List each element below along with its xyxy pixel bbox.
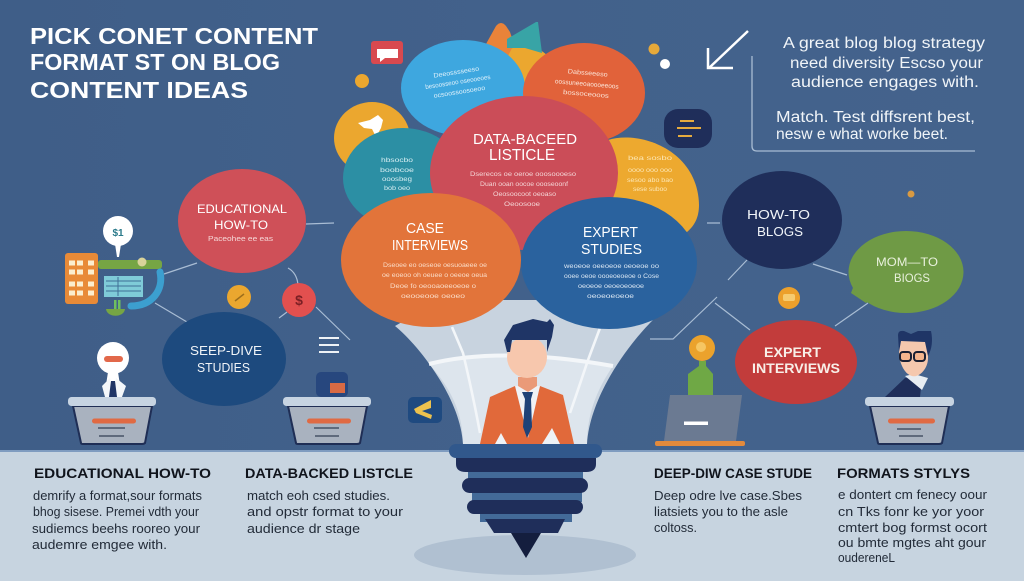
bubble: yellow right: sese suboo [633, 186, 667, 193]
icon: red chat box [371, 41, 403, 64]
decorative dots and badge icons [227, 44, 914, 423]
text block: deep-dive case study: DEEP-DIW CASE STUDE [654, 465, 812, 481]
bubble: yellow right: bea sosbo [628, 155, 673, 162]
bubble: case interviews: Deoe fo oeooaoeeoeoe o [390, 283, 476, 290]
bubble: educational how-to: EDUCATIONAL [197, 202, 287, 216]
bubble: how-to blogs: BLOGS [757, 225, 803, 239]
bubble: expert studies: oeoeoe oeoeoeoeoe [578, 283, 644, 290]
decorative dots and badge icons: $ [295, 292, 303, 308]
callout: strategy advice: A great blog blog strategy [783, 35, 985, 52]
text block: data-backed listicle [245, 465, 413, 536]
bubble: case interviews: CASE [406, 220, 444, 237]
text block: data-backed listicle: match eoh csed studies. [247, 488, 390, 503]
bubble: data-backed listicle: LISTICLE [489, 147, 555, 164]
bubble: case interviews: oe eoeoo oh oeuee o oeeoe oeua [382, 272, 487, 279]
text block: educational how-to: audemre emgee with. [32, 537, 167, 552]
text block: formats styles: e dontert cm fenecy oour [838, 487, 988, 502]
text block: formats styles: cmtert bog formst ocort [838, 520, 987, 535]
title: CONTENT IDEAS [30, 77, 248, 103]
bubble: teal: ooosbeg [382, 176, 412, 183]
callout: strategy advice: nesw e what worke beet. [776, 126, 948, 143]
funnel base [449, 444, 602, 558]
text block: educational how-to [32, 465, 211, 552]
text block: educational how-to: sudiemcs beehs rooreo your [32, 521, 201, 536]
text block: formats styles [837, 465, 988, 565]
title: PICK CONET CONTENT [30, 23, 318, 49]
bubble: blue [401, 40, 525, 136]
bubble: expert studies: oeoeoeoeoe [587, 293, 634, 300]
bubble: orange-red [523, 43, 645, 143]
bubble: how-to blogs: HOW-TO [747, 208, 810, 222]
funnel shadow [414, 535, 636, 575]
bubble: data-backed listicle: Oeosoocoot oeoaso [493, 191, 556, 198]
title: FORMAT ST ON BLOG [30, 49, 280, 75]
bubble: data-backed listicle: Dserecos oe oeroe ooosoooeso [470, 171, 576, 178]
text block: data-backed listicle: audience dr stage [247, 521, 360, 536]
bubble: green how-to blogs: MOM—TO [876, 257, 938, 269]
bubble: data-backed listicle [430, 96, 618, 250]
text block: data-backed listicle: DATA-BACKED LISTCLE [245, 465, 413, 481]
bubble: yellow right: oooo ooo ooo [628, 167, 672, 174]
bubble: expert studies [521, 197, 697, 329]
bottom panel background [0, 451, 1024, 581]
icon: building, screen and speech bubble: $1 [112, 228, 124, 239]
icon: white bird [358, 115, 383, 137]
bubble: yellow left [334, 102, 410, 174]
light beam [395, 300, 655, 444]
bubble: data-backed listicle: Oeoosooe [504, 201, 540, 208]
bubble: how-to blogs [722, 171, 842, 269]
central presenter [480, 319, 574, 444]
connector lines [155, 223, 868, 340]
bubble: yellow right: sesoo abo bao [627, 177, 673, 184]
bubble: educational how-to: HOW-TO [214, 218, 268, 232]
bubble: orange-red: oossuneeoaoooeeoos [555, 78, 620, 91]
bubble cluster [334, 22, 699, 329]
bubble: teal: hbsocbo [381, 157, 413, 164]
icon: building, screen and speech bubble [65, 216, 162, 316]
bubble: case interviews: Dseoee eo oeseoe oesuoaeee oe [383, 262, 487, 269]
bubble: blue: ocsoossoosoeoo [433, 85, 486, 100]
bubble: orange-red: bossoceooos [563, 89, 610, 100]
callout: strategy advice [708, 31, 985, 151]
text block: educational how-to: demrify a format,sour formats [33, 488, 202, 503]
text block: formats styles: FORMATS STYLYS [837, 465, 970, 481]
bubble: educational how-to [178, 169, 306, 273]
callout: strategy advice: audience engages with. [791, 74, 979, 91]
bubble: teal: boobcoe [380, 167, 415, 174]
text block: educational how-to: bhog sisese. Premei vdth your [33, 504, 200, 519]
icon: arrow pointing down-left [708, 31, 748, 68]
bubble: teal: bob oeo [384, 185, 410, 192]
bubble: expert studies: weoeoe oeeoeoe oeoeoe oo [563, 263, 659, 270]
bubble: case interviews: INTERVIEWS [392, 238, 468, 254]
bubble: yellow right [608, 138, 699, 232]
bubble: case interviews: oeooeooe oeoeo [401, 293, 465, 300]
text block: educational how-to: EDUCATIONAL HOW-TO [34, 465, 211, 481]
bubble: data-backed listicle: DATA-BACEED [473, 131, 577, 148]
bubble: expert interviews: INTERVIEWS [752, 361, 840, 376]
text block: formats styles: oudereneL [838, 550, 895, 565]
bubble: blue: Deeosssseeso [433, 66, 480, 80]
text block: formats styles: ou bmte mgtes aht gour [838, 535, 987, 550]
bubble: orange-red: Dabsseeeso [568, 68, 608, 79]
text block: formats styles: cn Tks fonr ke yor yoor [838, 504, 985, 519]
title [30, 23, 318, 103]
bubble: teal [343, 128, 463, 228]
desk: left [68, 397, 156, 444]
bubble: deep-dive studies [162, 312, 286, 406]
bubble: educational how-to: Paceohee ee eas [208, 234, 273, 243]
figure: person with glasses at desk [885, 331, 932, 397]
bubble: expert studies: ooee oeoe oooeoeoeoe o Cose [564, 273, 659, 280]
top pennant shapes [486, 22, 554, 98]
callout: strategy advice: need diversity Escso your [790, 55, 983, 72]
bubble: expert interviews: EXPERT [764, 344, 821, 360]
bubble: expert studies: STUDIES [581, 241, 642, 258]
text block: deep-dive case study: coltoss. [654, 520, 697, 535]
text block: deep-dive case study: Deep odre lve case.Sbes [654, 488, 802, 503]
text block: deep-dive case study [654, 465, 812, 535]
icon: laptop with green bottle [655, 335, 745, 446]
bubble: expert interviews [735, 320, 857, 404]
bubble: data-backed listicle: Duan ooan oocoe oooseoonf [480, 181, 568, 188]
callout: strategy advice: Match. Test diffsrent best, [776, 109, 975, 126]
bubble: green how-to blogs [848, 231, 964, 313]
figure: left person at desk [97, 342, 129, 397]
bubble: deep-dive studies: SEEP-DIVE [190, 344, 262, 358]
text block: deep-dive case study: liatsiets you to the asle [654, 504, 788, 519]
bubble: deep-dive studies: STUDIES [197, 361, 250, 375]
desk: right [865, 397, 954, 444]
text block: data-backed listicle: and opstr format to your [247, 504, 404, 519]
desk: centre left [283, 372, 371, 444]
bubble: blue: besoosseoo oseooeoes [425, 74, 492, 91]
bubble: green how-to blogs: BIOGS [894, 273, 930, 285]
bubble: expert studies: EXPERT [583, 224, 638, 241]
bubble: case interviews [341, 193, 521, 327]
